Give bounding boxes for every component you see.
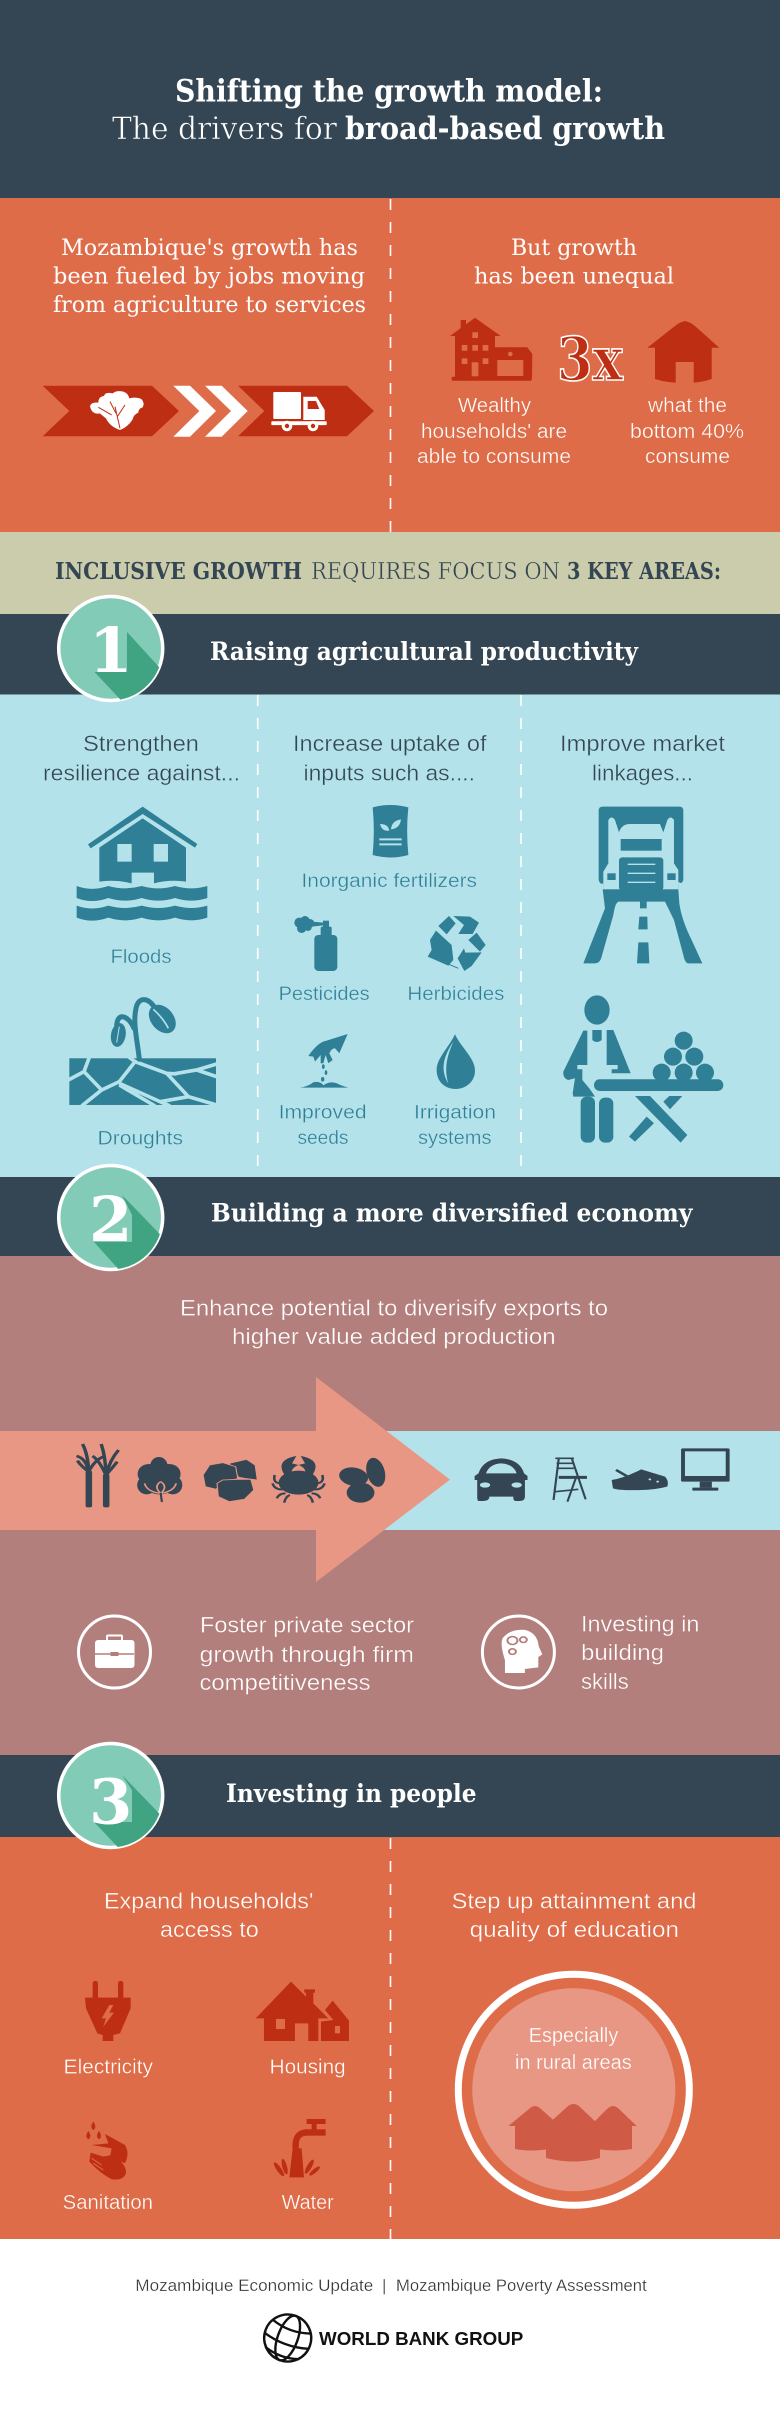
- heading: inclusive growth: REQUIRES FOCUS ON: [311, 559, 560, 585]
- icon: folding chair: [554, 1458, 587, 1502]
- icon: flooded house: [77, 807, 207, 921]
- label: water: Water: [282, 2192, 334, 2214]
- icon: hand sowing seeds: [300, 1034, 348, 1088]
- text: growth fueled by jobs moving: been fueled by jobs moving: [53, 264, 365, 290]
- text: foster private sector: [200, 1613, 414, 1695]
- band: section 1 title: [0, 596, 780, 712]
- text: sources: [135, 2276, 647, 2295]
- text: strengthen resilience: [43, 731, 240, 786]
- label: floods: Floods: [110, 946, 172, 968]
- panel: growth drivers: [0, 198, 780, 532]
- heading: raising agricultural productivity: Raising agricultural productivity: [210, 637, 639, 666]
- icon: truck on road: [583, 807, 702, 963]
- label: housing: Housing: [270, 2056, 346, 2078]
- text: growth has been unequal: has been unequal: [474, 264, 674, 290]
- text: bottom 40 percent: what the: [647, 394, 727, 417]
- text: expand households access: Expand households': [104, 1889, 313, 1914]
- text: wealthy households: households' are: [421, 420, 567, 443]
- text: increase uptake: [293, 731, 487, 786]
- text: bottom 40 percent: [630, 394, 744, 468]
- icon: monitor: [681, 1448, 730, 1491]
- text: enhance potential: Enhance potential to diverisify exports to: [180, 1296, 608, 1320]
- label: herbicides: Herbicides: [407, 983, 505, 1005]
- badge: number 2: 2: [89, 1183, 132, 1256]
- icon: fertilizer bag: [373, 805, 408, 857]
- icon: car: [475, 1458, 528, 1501]
- label: improved seeds: [279, 1102, 367, 1149]
- heading: inclusive growth: INCLUSIVE GROWTH: [55, 558, 302, 585]
- text: strengthen resilience: Strengthen: [83, 731, 199, 756]
- text: foster private sector: Foster private sector: [200, 1613, 414, 1638]
- panel: key areas heading: [0, 532, 780, 614]
- icon: drought seedling: [68, 999, 217, 1106]
- title: [112, 74, 665, 147]
- text: investing in building skills: building: [581, 1640, 664, 1665]
- icon: water tap: [272, 2119, 326, 2177]
- logo: world bank group: WORLD BANK GROUP: [319, 2328, 523, 2349]
- callout: especially in rural areas: [458, 1974, 689, 2205]
- panel: section 3 investing in people: [0, 1744, 780, 2239]
- text: foster private sector: growth through firm: [200, 1642, 414, 1667]
- icon: rural huts: [508, 2104, 637, 2162]
- text: improve market linkages: Improve market: [560, 731, 726, 756]
- title: broad-based growth: [345, 111, 665, 147]
- icon: rocks: [203, 1459, 257, 1502]
- text: growth has been unequal: [474, 236, 674, 290]
- text: increase uptake: Increase uptake of: [293, 731, 487, 756]
- icon: water drop: [437, 1034, 475, 1089]
- text: investing in building skills: skills: [581, 1669, 629, 1694]
- label: electricity: Electricity: [64, 2056, 153, 2078]
- text: growth has been unequal: But growth: [511, 236, 637, 261]
- label: improved seeds: Improved: [279, 1102, 367, 1124]
- icon: herbicide recycle leaf: [428, 916, 486, 971]
- text: bottom 40 percent: bottom 40%: [630, 420, 744, 443]
- badge: number 1: 1: [89, 614, 132, 687]
- arrow: agriculture chevron with lettuce icon: [43, 386, 179, 436]
- logo: world bank group: [258, 2308, 523, 2368]
- title: The drivers for: [112, 111, 337, 147]
- title: Shifting the growth model:: [175, 74, 603, 110]
- label: irrigation systems: systems: [418, 1127, 492, 1149]
- icon: market vendor: [563, 995, 723, 1143]
- heading: inclusive growth: 3 KEY AREAS:: [567, 558, 721, 585]
- text: step up attainment: Step up attainment and: [452, 1889, 696, 1914]
- text: enhance potential: [180, 1296, 608, 1349]
- text: expand households access: access to: [160, 1917, 259, 1942]
- panel: title header: [0, 0, 780, 198]
- callout: especially in rural areas: in rural areas: [515, 2052, 632, 2074]
- icon: beans: [336, 1457, 388, 1503]
- label: irrigation systems: [414, 1102, 496, 1149]
- heading: building a more diversified economy: Building a more diversified economy: [211, 1198, 694, 1227]
- text: increase uptake: inputs such as....: [304, 760, 475, 786]
- icon: washing hands: [86, 2122, 127, 2180]
- badge: number 3: 3: [89, 1766, 132, 1838]
- text: step up attainment: quality of education: [470, 1917, 679, 1942]
- label: irrigation systems: Irrigation: [414, 1102, 496, 1124]
- text: wealthy households: Wealthy: [458, 394, 532, 417]
- text: growth fueled by jobs moving: from agriculture to services: [53, 293, 366, 318]
- text: step up attainment: [452, 1889, 696, 1942]
- text: foster private sector: competitiveness: [200, 1670, 370, 1695]
- band: export destination strip: [380, 1431, 780, 1530]
- text: wealthy households: [417, 394, 571, 468]
- panel: footer: [0, 2239, 780, 2409]
- panel: section 1 agriculture: [0, 596, 780, 1178]
- badge: number 3: [56, 1742, 164, 1850]
- icon: clog shoe: [612, 1469, 668, 1490]
- panel: section 2 diversified economy: [0, 1166, 780, 1755]
- callout: especially in rural areas: Especially: [529, 2025, 618, 2047]
- label: inorganic fertilizers: Inorganic fertilizers: [302, 870, 477, 892]
- text: improve market linkages: [560, 731, 726, 786]
- band: section 2 title: [0, 1166, 780, 1282]
- text: strengthen resilience: resilience against...: [43, 760, 240, 786]
- arrow: services chevron with truck icon: [238, 386, 374, 436]
- text: expand households access: [104, 1889, 313, 1942]
- badge: number 1: [56, 594, 164, 702]
- label: sanitation: Sanitation: [63, 2192, 153, 2214]
- icon: briefcase in circle: [78, 1616, 150, 1688]
- text: sources: |: [382, 2276, 386, 2295]
- label: droughts: Droughts: [98, 1128, 183, 1150]
- heading: investing in people: Investing in people: [226, 1779, 476, 1808]
- icon: houses: [256, 1982, 349, 2041]
- icon: sugar cane: [76, 1444, 119, 1507]
- text: growth fueled by jobs moving: Mozambique's growth has: [61, 236, 358, 261]
- band: section 3 title: [0, 1744, 780, 1860]
- label: improved seeds: seeds: [298, 1127, 349, 1149]
- icon: cotton: [137, 1457, 182, 1502]
- text: bottom 40 percent: consume: [645, 445, 730, 468]
- badge: number 2: [56, 1164, 164, 1272]
- text: improve market linkages: linkages...: [592, 760, 693, 786]
- icon: wealthy house: [450, 318, 532, 381]
- text: investing in building skills: Investing in: [581, 1611, 699, 1636]
- text: wealthy households: able to consume: [417, 445, 571, 468]
- label: pesticides: Pesticides: [279, 983, 370, 1005]
- text: enhance potential: higher value added production: [232, 1324, 556, 1349]
- text: sources: Mozambique Poverty Assessment: [396, 2276, 647, 2295]
- icon: electric plug: [85, 1981, 131, 2041]
- heading: inclusive growth: [55, 558, 721, 585]
- text: 3x multiplier: 3x: [557, 325, 624, 395]
- arrow: white chevrons: [173, 386, 248, 437]
- icon: crab: [273, 1456, 325, 1503]
- text: sources: Mozambique Economic Update: [135, 2276, 373, 2295]
- text: investing in building skills: [581, 1611, 699, 1694]
- arrow: from raw goods to value added: [0, 1377, 450, 1582]
- icon: small hut: [647, 321, 719, 383]
- text: growth fueled by jobs moving: [53, 236, 366, 318]
- icon: head with gears in circle: [482, 1616, 554, 1688]
- icon: pesticide spray: [294, 916, 337, 971]
